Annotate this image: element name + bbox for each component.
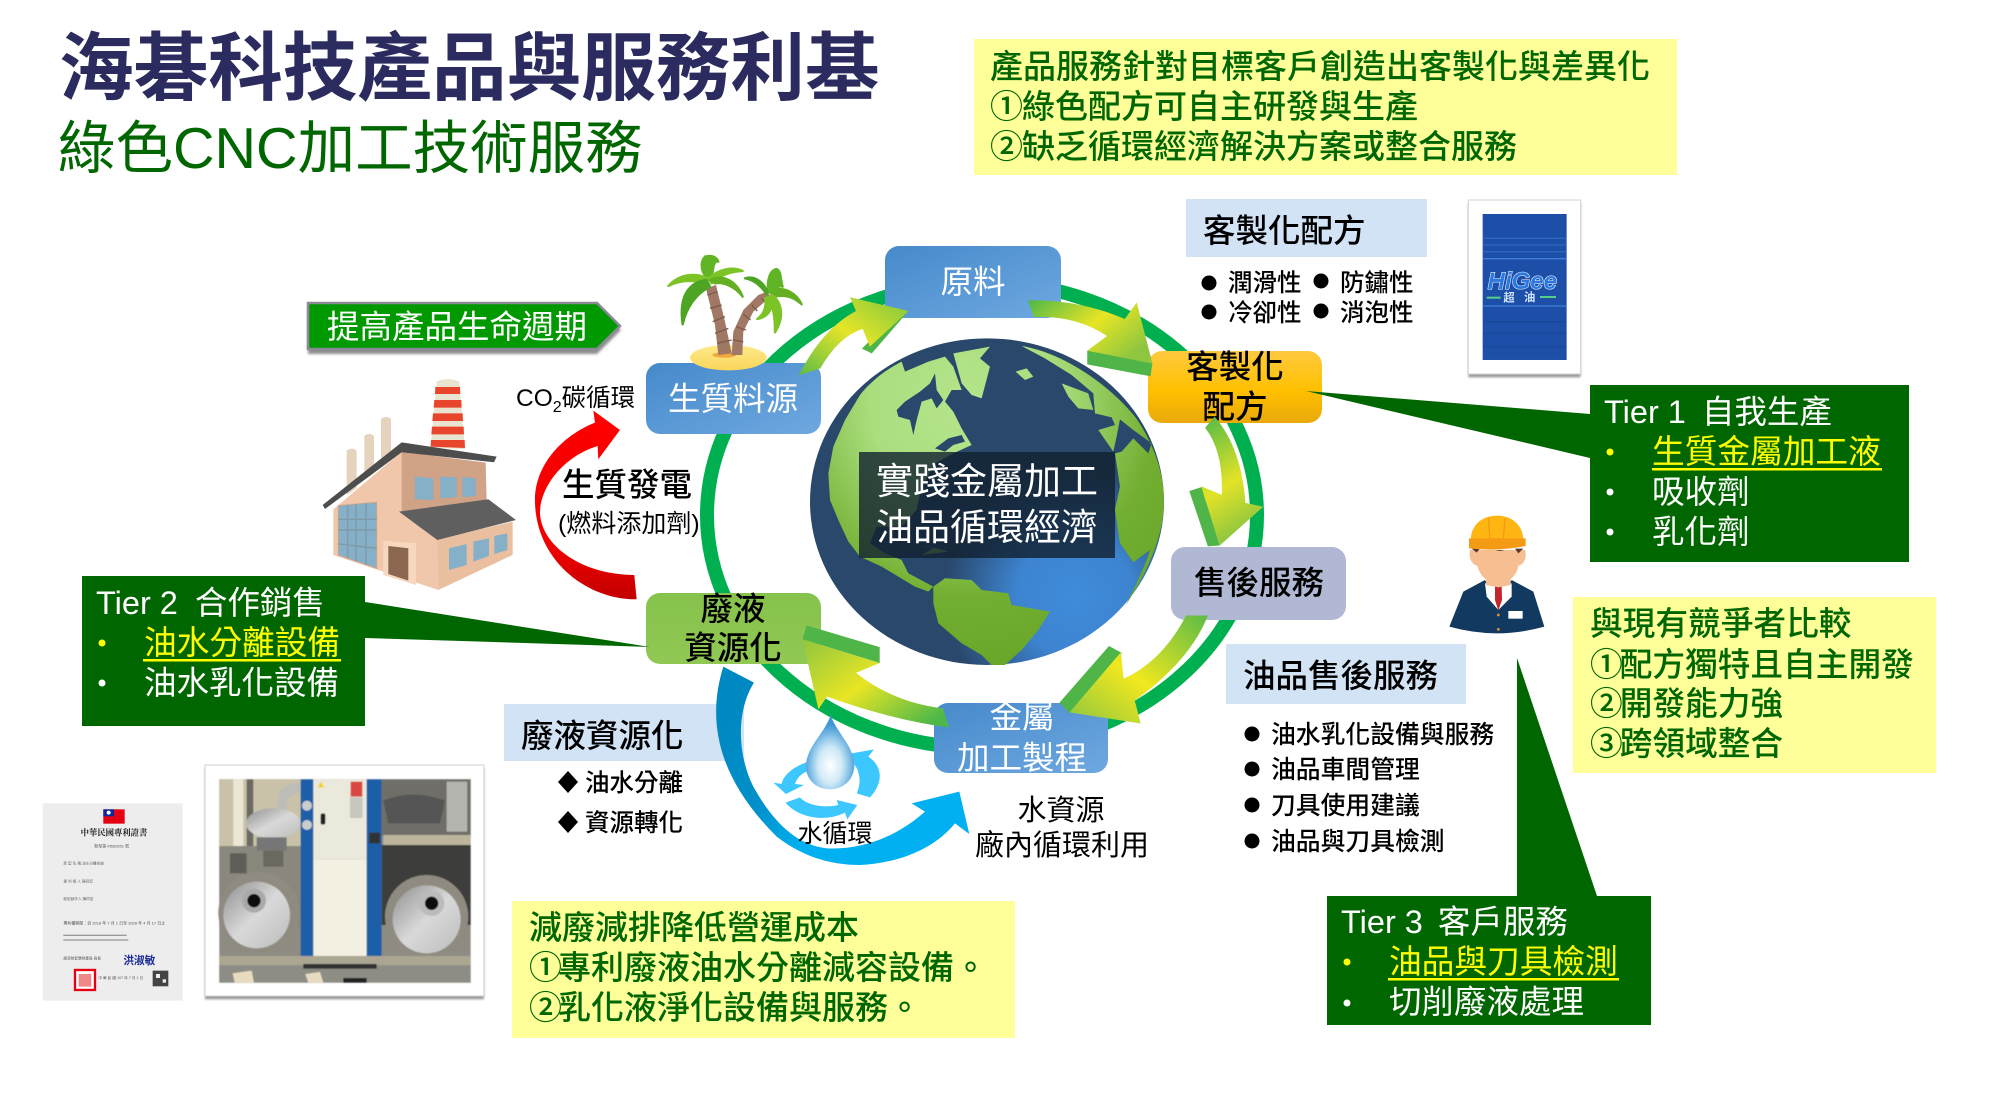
callout: customization <box>974 39 1677 175</box>
photo: oil-water separator machine <box>205 765 484 999</box>
label: biomass power: 生質發電 <box>562 467 692 503</box>
node: raw material <box>885 246 1061 318</box>
callout: competitor comparison: 與現有競爭者比較 <box>1590 605 1852 642</box>
label arrow: extend product life <box>308 303 621 354</box>
callout: waste reduction: 減廢減排降低營運成本 <box>529 909 859 946</box>
panel: Tier 2: 油水分離設備 <box>144 624 340 661</box>
globe caption: 油品循環經濟 <box>876 507 1098 548</box>
callout: waste reduction: ①專利廢液油水分離減容設備。 <box>529 949 987 986</box>
panel: Tier 2: Tier 2 合作銷售 <box>96 585 325 621</box>
list: waste fluid items: 資源轉化 <box>585 809 683 837</box>
photo: oil drum <box>1468 200 1581 377</box>
callout: competitor comparison: ①配方獨特且自主開發 <box>1590 646 1914 683</box>
cycle arrows <box>799 297 1263 727</box>
photo: patent certificate: 中華民國專利證書 <box>81 827 148 837</box>
list: after-sales services: 油品與刀具檢測 <box>1271 828 1445 856</box>
callout: waste reduction <box>512 901 1015 1038</box>
label: biomass power: (燃料添加劑) <box>558 510 700 538</box>
label arrow: extend product life: 提高產品生命週期 <box>327 309 587 345</box>
node: waste fluid recycling <box>646 591 821 666</box>
label: CO2 carbon cycle: CO <box>516 385 553 412</box>
photo: patent certificate: 專 利 權 人 陳同宏 <box>63 879 93 884</box>
list: after-sales services: 刀具使用建議 <box>1271 792 1420 820</box>
photo: oil drum: 油 <box>1524 290 1535 304</box>
callout: competitor comparison: ③跨領域整合 <box>1590 725 1783 762</box>
photo: patent certificate: 專利權期間：自 2018 年 7 月 1 日至 2028 年 4 月 17 日止 <box>63 920 165 926</box>
panel: Tier 3: Tier 3 客戶服務 <box>1341 904 1568 940</box>
globe caption <box>859 452 1115 558</box>
label: water resources: 水資源 <box>1017 794 1105 827</box>
icon: palm trees <box>668 256 802 370</box>
arrow: after-sales to metalworking <box>1060 616 1208 723</box>
node: custom formula: 配方 <box>1202 389 1268 425</box>
icon: engineer <box>1449 516 1544 633</box>
node: after-sales service <box>1171 547 1346 620</box>
arrow: metalworking to waste fluid <box>803 625 949 727</box>
list: waste fluid items <box>558 769 683 837</box>
arrow: biomass to raw material <box>799 297 909 376</box>
icon: factory <box>323 379 516 590</box>
arrow: raw material to formula <box>1028 300 1153 376</box>
list: after-sales services <box>1244 721 1494 856</box>
node: metalworking process: 加工製程 <box>957 740 1087 776</box>
photo: patent certificate: 新 型 名 稱 油水分離系統 <box>63 860 104 865</box>
green ring <box>707 282 1257 748</box>
photo: patent certificate: 新型第 M562651 號 <box>94 842 129 848</box>
panel: Tier 1 <box>1306 385 1909 562</box>
node: biomass source: 生質料源 <box>668 381 798 417</box>
panel: Tier 1: 吸收劑 <box>1652 474 1750 510</box>
label: water resources: 廠內循環利用 <box>975 829 1149 862</box>
globe <box>810 338 1164 665</box>
label: water resources <box>975 794 1149 862</box>
callout: competitor comparison <box>1573 597 1936 773</box>
panel: Tier 1: 乳化劑 <box>1652 514 1750 550</box>
list: formula properties: 消泡性 <box>1340 299 1414 327</box>
list: formula properties: 潤滑性 <box>1228 269 1302 297</box>
node: after-sales service: 售後服務 <box>1194 565 1324 601</box>
panel: Tier 3 <box>1327 658 1651 1025</box>
list: after-sales services: 油品車間管理 <box>1271 756 1420 784</box>
callout: customization: 產品服務針對目標客戶創造出客製化與差異化 <box>990 48 1650 85</box>
arrow: red carbon cycle <box>535 411 637 599</box>
label: CO2 carbon cycle: 碳循環 <box>562 384 635 412</box>
panel: waste fluid heading: 廢液資源化 <box>521 718 684 754</box>
panel: Tier 3: 切削廢液處理 <box>1389 984 1584 1020</box>
panel: Tier 1: Tier 1 自我生產 <box>1604 394 1832 430</box>
panel: Tier 3: 油品與刀具檢測 <box>1389 943 1618 980</box>
photo: patent certificate: 中 華 民 國 107 年 7 月 1 日 <box>98 975 144 980</box>
subtitle: 綠色CNC加工技術服務 <box>58 117 643 181</box>
node: custom formula: 客製化 <box>1186 349 1284 385</box>
node: raw material: 原料 <box>940 264 1006 300</box>
callout: competitor comparison: ②開發能力強 <box>1590 685 1783 722</box>
panel: after-sales heading <box>1226 644 1466 704</box>
photo: patent certificate: 新型創作人 陳同宏 <box>63 896 94 901</box>
node: biomass source <box>646 363 821 434</box>
panel: Tier 2: 油水乳化設備 <box>144 665 339 701</box>
title: 海碁科技產品與服務利基 <box>59 26 880 110</box>
list: formula properties: 冷卻性 <box>1228 299 1302 327</box>
panel: after-sales heading: 油品售後服務 <box>1243 658 1438 694</box>
panel: custom formula heading: 客製化配方 <box>1203 213 1366 249</box>
callout: customization: ①綠色配方可自主研發與生產 <box>990 88 1418 125</box>
panel: waste fluid heading <box>504 704 744 761</box>
globe caption: 實踐金屬加工 <box>876 461 1098 502</box>
callout: customization: ②缺乏循環經濟解決方案或整合服務 <box>990 128 1517 165</box>
arrow: formula to after-sales <box>1189 417 1263 546</box>
panel: custom formula heading <box>1186 199 1427 257</box>
photo: oil drum: 超 <box>1503 291 1515 305</box>
list: waste fluid items: 油水分離 <box>585 769 683 797</box>
label: CO2 carbon cycle: 2 <box>553 399 562 416</box>
label: biomass power <box>558 467 700 538</box>
list: after-sales services: 油水乳化設備與服務 <box>1271 721 1494 749</box>
arrow: blue water cycle <box>716 667 969 865</box>
node: waste fluid recycling: 廢液 <box>700 591 766 627</box>
photo: patent certificate <box>43 803 183 1001</box>
panel: Tier 2 <box>82 576 650 726</box>
photo: patent certificate: 經濟部智慧財產局 局長 <box>63 955 101 960</box>
photo: patent certificate: 洪淑敏 <box>123 954 156 967</box>
node: waste fluid recycling: 資源化 <box>684 630 782 666</box>
label: CO2 carbon cycle <box>516 384 635 416</box>
list: formula properties: 防鏽性 <box>1340 269 1414 297</box>
photo: oil drum: HiGee <box>1488 268 1557 295</box>
callout: waste reduction: ②乳化液淨化設備與服務。 <box>529 989 921 1026</box>
node: custom formula <box>1148 349 1322 425</box>
label: water cycle: 水循環 <box>797 820 873 848</box>
panel: Tier 1: 生質金屬加工液 <box>1652 433 1881 470</box>
node: metalworking process <box>934 699 1108 776</box>
list: formula properties <box>1202 269 1414 327</box>
icon: water drop with recycle arrows <box>773 715 880 819</box>
node: metalworking process: 金屬 <box>989 699 1055 735</box>
